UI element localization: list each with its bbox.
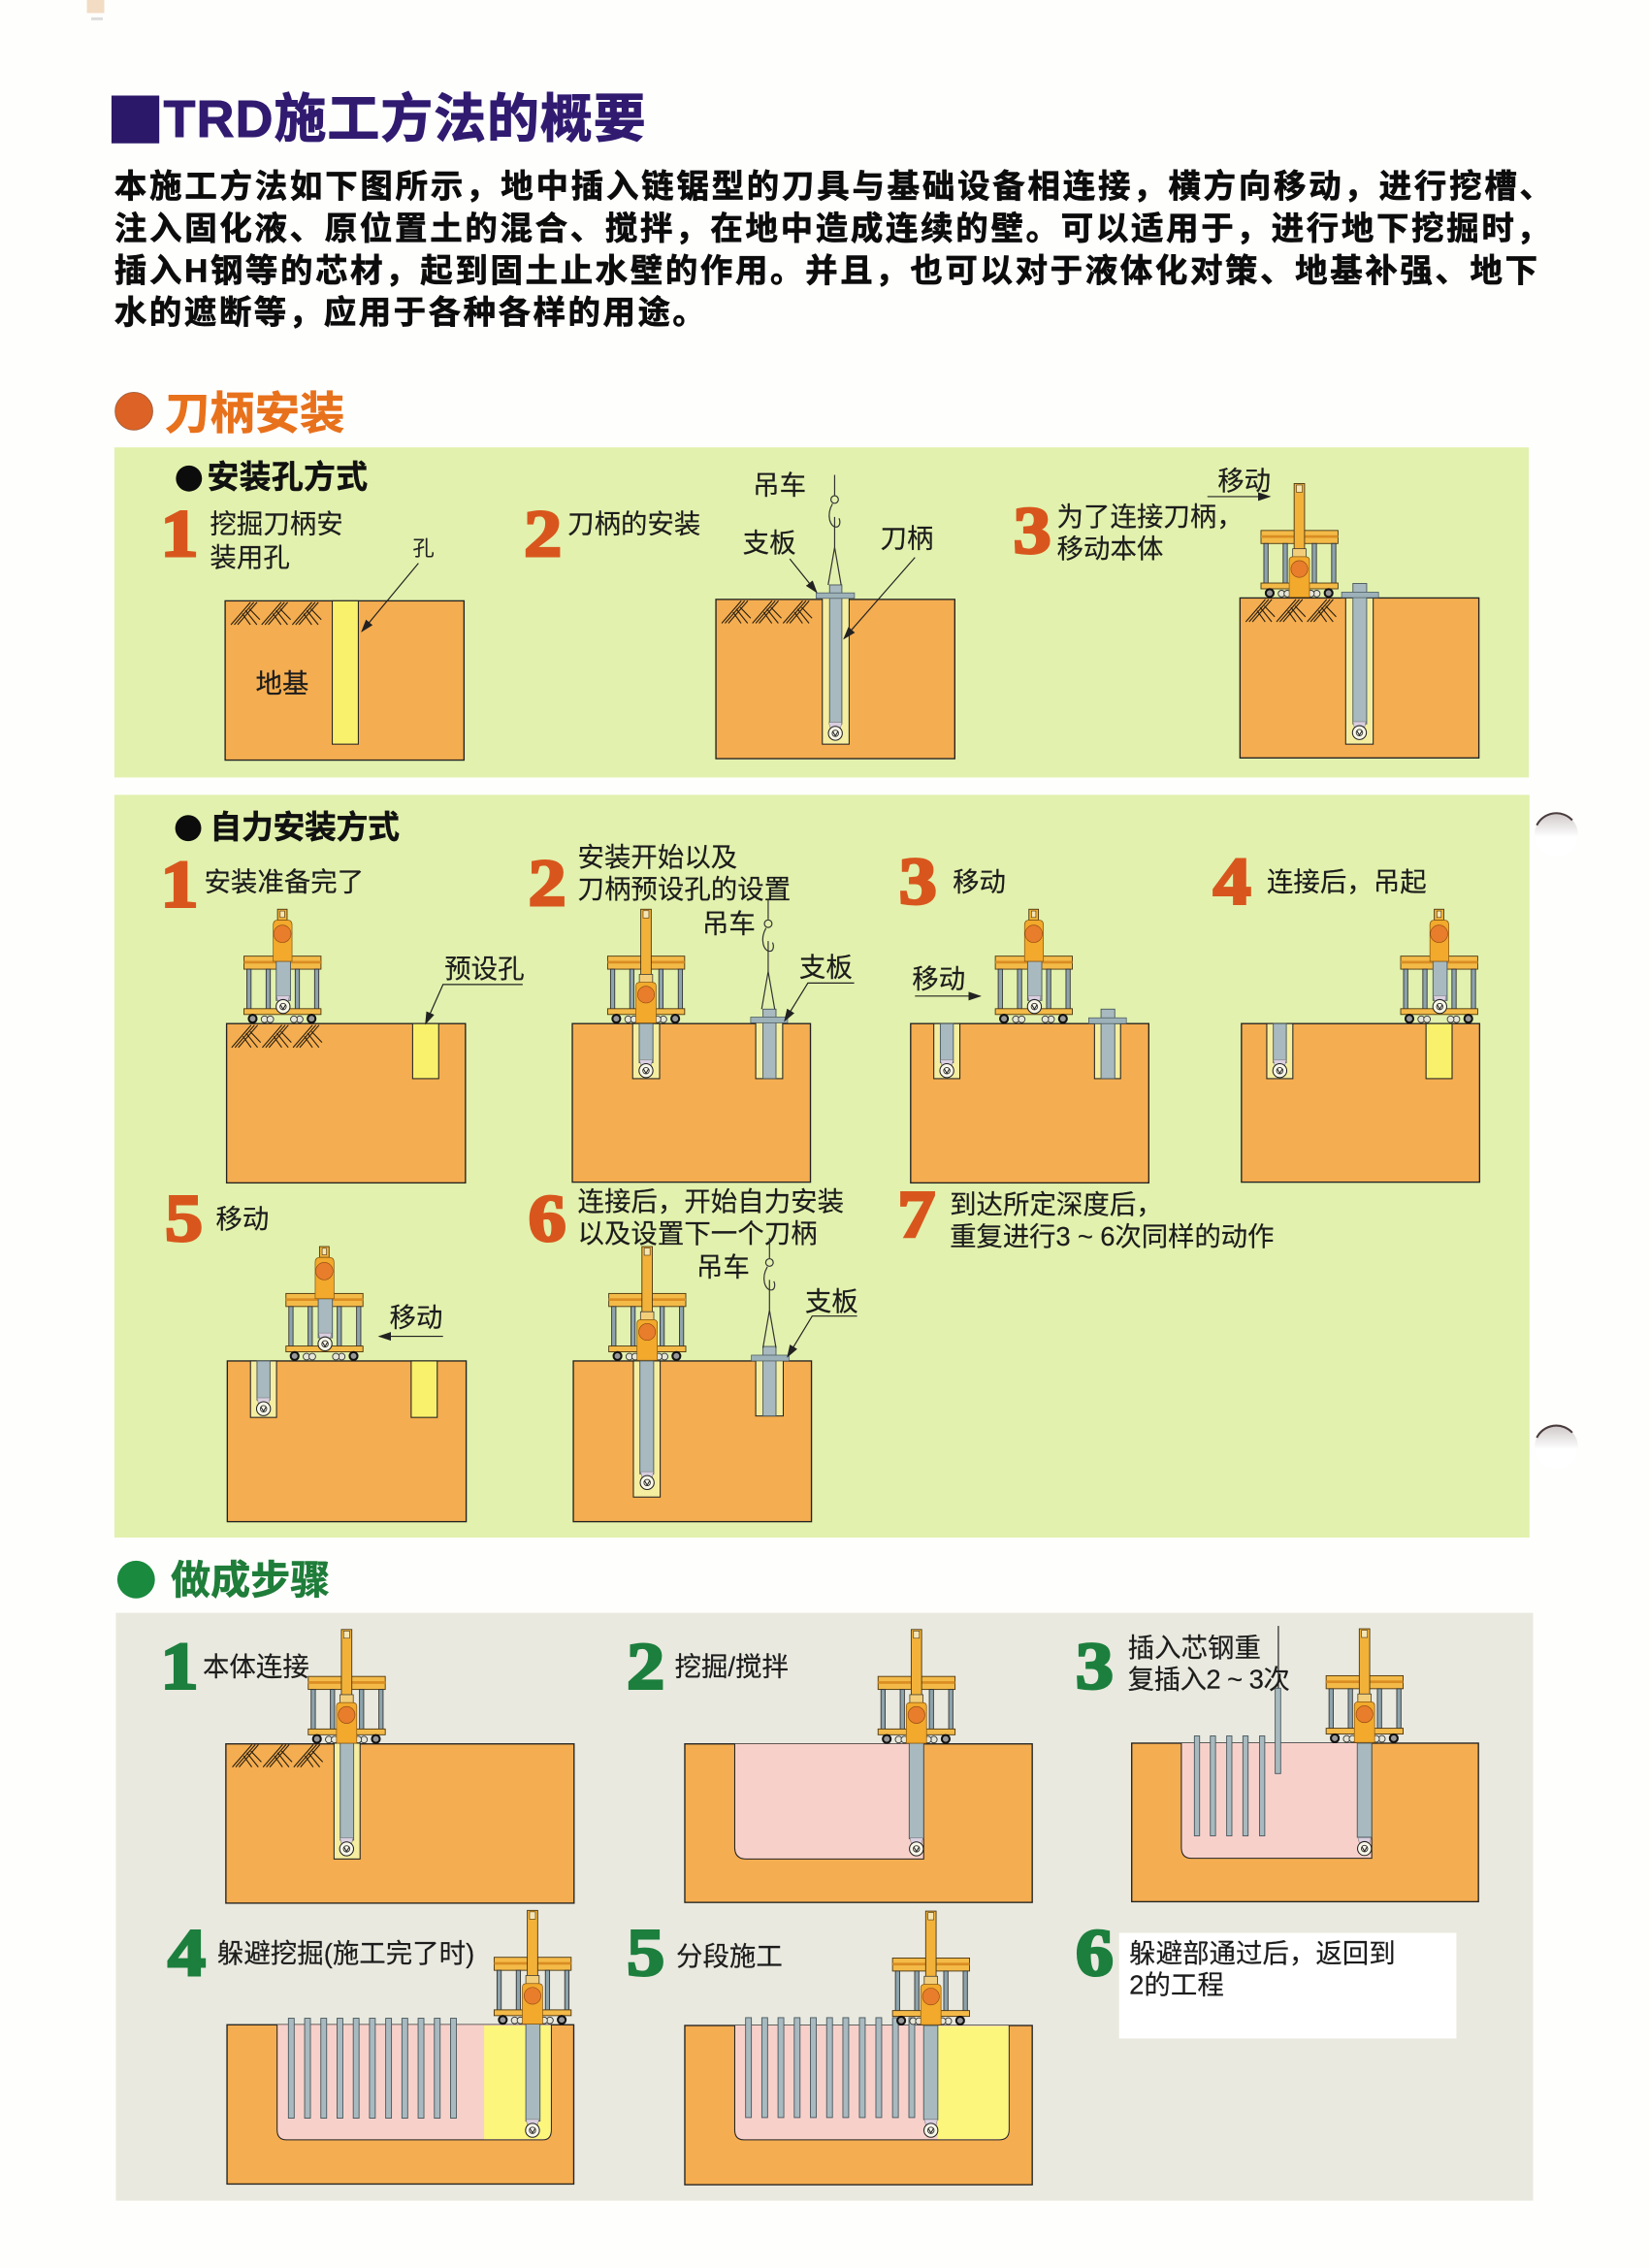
- step 2: 挖掘/搅拌: [675, 1651, 789, 1681]
- step 3: 移动本体: [1057, 534, 1163, 564]
- step 5: 移动: [390, 1303, 442, 1333]
- panel background: [114, 447, 1529, 777]
- step 7: [897, 1178, 1274, 1251]
- step 6: 6: [529, 1182, 566, 1255]
- title: [112, 90, 646, 148]
- step 3: 移动: [912, 963, 965, 993]
- panel: construction steps: [115, 1613, 1534, 2201]
- step 2: 安装开始以及: [578, 842, 737, 872]
- step 1: 挖掘刀柄安: [210, 509, 343, 539]
- step 3: [899, 844, 1148, 1183]
- step 2: 2: [524, 497, 562, 570]
- orange bullet: [115, 392, 152, 430]
- step 4: 连接后，吊起: [1267, 866, 1427, 896]
- intro text block: [114, 170, 1552, 332]
- scan artifact top left: [87, 0, 104, 20]
- intro text block: 注入固化液、原位置土的混合、搅拌，在地中造成连续的壁。可以适用于，进行地下挖掘时，: [114, 211, 1549, 247]
- step 1: [161, 847, 525, 1183]
- step 5: [165, 1182, 467, 1522]
- step 1: [161, 497, 464, 761]
- title text: TRD施工方法的概要: [164, 90, 646, 148]
- step 2: 刀柄的安装: [567, 509, 700, 539]
- step 6: 连接后，开始自力安装: [578, 1186, 844, 1216]
- panel: self-installation method: [114, 794, 1530, 1538]
- panel: installation hole method: [114, 447, 1529, 777]
- step 1: 预设孔: [444, 954, 525, 984]
- step 4: [1213, 844, 1479, 1183]
- step 1: 1: [161, 1629, 198, 1702]
- step 3: 3: [1014, 494, 1051, 567]
- step 2: 刀柄预设孔的设置: [578, 874, 791, 904]
- panel background: [115, 1613, 1534, 2201]
- intro text block: 本施工方法如下图所示，地中插入链锯型的刀具与基础设备相连接，横方向移动，进行挖槽、: [114, 170, 1552, 206]
- intro text block: 插入H钢等的芯材，起到固土止水壁的作用。并且，也可以对于液体化对策、地基补强、地下: [114, 253, 1537, 289]
- binder hole mark upper: [1535, 813, 1578, 857]
- step 1: 1: [161, 497, 198, 570]
- step 2: 吊车: [702, 909, 756, 939]
- step 4: 4: [1213, 844, 1251, 918]
- heading text: 刀柄安装: [165, 388, 344, 438]
- step 2: [524, 470, 954, 759]
- step 4: [168, 1910, 573, 2184]
- step 1: 孔: [412, 536, 435, 561]
- section heading: blade handle installation: [115, 388, 344, 438]
- sub heading: 自力安装方式: [210, 809, 400, 845]
- green bullet: [117, 1561, 155, 1599]
- step 3: [1076, 1626, 1478, 1901]
- step 2: 刀柄: [880, 524, 933, 554]
- step 1: 地基: [255, 668, 308, 698]
- step 6: [529, 1182, 858, 1522]
- step 7: 7: [897, 1178, 935, 1251]
- step 3: 复插入2 ~ 3次: [1128, 1665, 1290, 1695]
- step 4: 躲避挖掘(施工完了时): [217, 1938, 474, 1968]
- panel background: [114, 794, 1530, 1538]
- step 2: 支板: [743, 528, 796, 558]
- step 7: 重复进行3 ~ 6次同样的动作: [950, 1221, 1274, 1251]
- step 3: 为了连接刀柄，: [1057, 502, 1244, 532]
- step 2: [529, 842, 855, 1183]
- section heading: construction steps: [117, 1558, 330, 1603]
- step 6: 6: [1076, 1916, 1114, 1990]
- step 2: 2: [627, 1629, 664, 1702]
- step 2: 2: [529, 846, 566, 920]
- step 6: 吊车: [696, 1251, 750, 1281]
- step 3: [1014, 466, 1479, 758]
- step 1: [161, 1629, 574, 1903]
- step 6: 躲避部通过后，返回到: [1129, 1938, 1396, 1968]
- step 1: 本体连接: [203, 1651, 309, 1681]
- step 3: 移动: [953, 866, 1006, 896]
- step 6: 以及设置下一个刀柄: [578, 1218, 818, 1248]
- step 5: 5: [165, 1182, 203, 1255]
- step 3: 移动: [1217, 466, 1271, 496]
- intro text block: 水的遮断等，应用于各种各样的用途。: [114, 296, 705, 332]
- step 5: 5: [627, 1916, 664, 1990]
- step 7: 到达所定深度后，: [950, 1189, 1163, 1219]
- sub heading: 安装孔方式: [207, 459, 368, 495]
- step 6: 2的工程: [1129, 1970, 1224, 2000]
- step 1: 1: [161, 847, 198, 921]
- binder hole mark lower: [1535, 1425, 1578, 1469]
- title square icon: [112, 96, 159, 144]
- step 3: 3: [899, 844, 937, 918]
- heading text: 做成步骤: [171, 1558, 330, 1603]
- step 5: 移动: [215, 1204, 269, 1234]
- step 2: 吊车: [753, 470, 806, 500]
- step 6: [1076, 1916, 1456, 2038]
- step 3: 3: [1076, 1629, 1114, 1702]
- step 2: [627, 1629, 1032, 1902]
- step 5: [627, 1911, 1032, 2185]
- step 1: 安装准备完了: [204, 866, 364, 896]
- step 6: 支板: [805, 1286, 858, 1316]
- step 4: 4: [168, 1916, 206, 1990]
- step 1: 装用孔: [210, 542, 290, 572]
- step 2: 支板: [799, 952, 853, 982]
- step 3: 插入芯钢重: [1128, 1633, 1261, 1663]
- step 5: 分段施工: [676, 1941, 783, 1971]
